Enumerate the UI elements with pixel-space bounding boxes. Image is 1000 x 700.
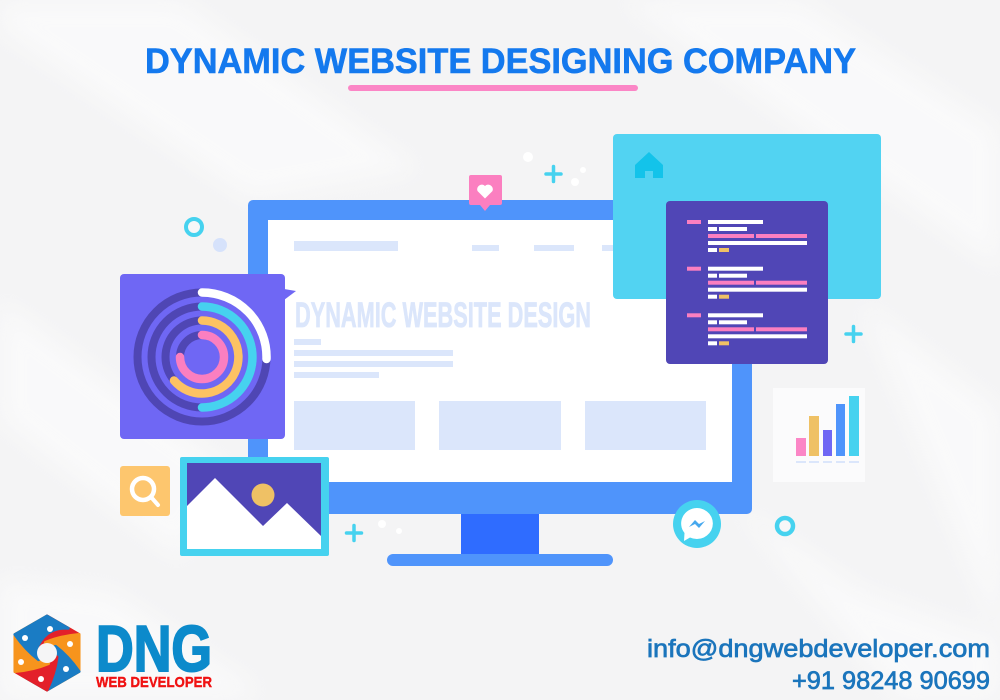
- icon: search: [120, 466, 170, 516]
- sun: [252, 484, 274, 506]
- icon: messenger: [673, 500, 721, 548]
- icon: heart notification: [469, 175, 502, 211]
- title underline: [348, 85, 638, 91]
- code block 1: [687, 220, 807, 252]
- screen headline: DYNAMIC WEBSITE DESIGN: [295, 296, 591, 335]
- icon: ring top left: [186, 219, 202, 235]
- monitor stand: [461, 513, 539, 555]
- panel: code window: [666, 201, 828, 364]
- icon: ring bottom right: [777, 518, 793, 534]
- title: DYNAMIC WEBSITE DESIGNING COMPANY: [145, 42, 856, 81]
- panel: radial progress chart: [120, 274, 296, 439]
- logo mark: [0, 607, 95, 699]
- monitor frame: [248, 200, 752, 514]
- monitor screen: [268, 220, 732, 482]
- navigation placeholders: [472, 245, 616, 251]
- body text placeholders: [294, 339, 453, 378]
- icon: plus signs: [346, 166, 861, 540]
- monitor: [248, 200, 752, 566]
- logo tagline: WEB DEVELOPER: [96, 674, 212, 691]
- code block 3: [687, 313, 807, 345]
- decorative dots: [378, 152, 586, 534]
- bars: [796, 396, 859, 456]
- chart arcs: [174, 292, 267, 408]
- axis ticks: [796, 461, 859, 463]
- icon: home: [635, 152, 663, 178]
- icon: pale dot: [213, 238, 227, 252]
- panel: cyan browser window: [613, 134, 881, 299]
- panel: image placeholder: [180, 457, 329, 556]
- site logo placeholder: [294, 241, 398, 251]
- contact phone: +91 98248 90699: [792, 667, 990, 695]
- content card placeholders: [294, 401, 706, 450]
- code block 2: [687, 267, 807, 299]
- contact email: info@dngwebdeveloper.com: [647, 635, 990, 663]
- panel: bar chart: [773, 388, 865, 482]
- monitor base: [387, 554, 613, 566]
- mountains: [187, 478, 321, 549]
- logo wordmark: DNG: [96, 612, 212, 685]
- chart rings: [138, 292, 266, 422]
